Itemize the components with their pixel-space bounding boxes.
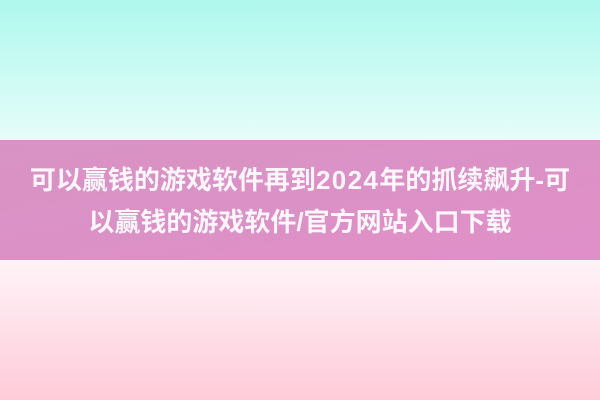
bottom pink gradient background [0, 260, 600, 400]
pink title band [0, 140, 600, 260]
title: 可以赢钱的游戏软件再到2024年的抓续飙升-可 [30, 165, 570, 195]
title [30, 165, 570, 237]
title: 以赢钱的游戏软件/官方网站入口下载 [88, 207, 512, 237]
top mint gradient background [0, 0, 600, 140]
